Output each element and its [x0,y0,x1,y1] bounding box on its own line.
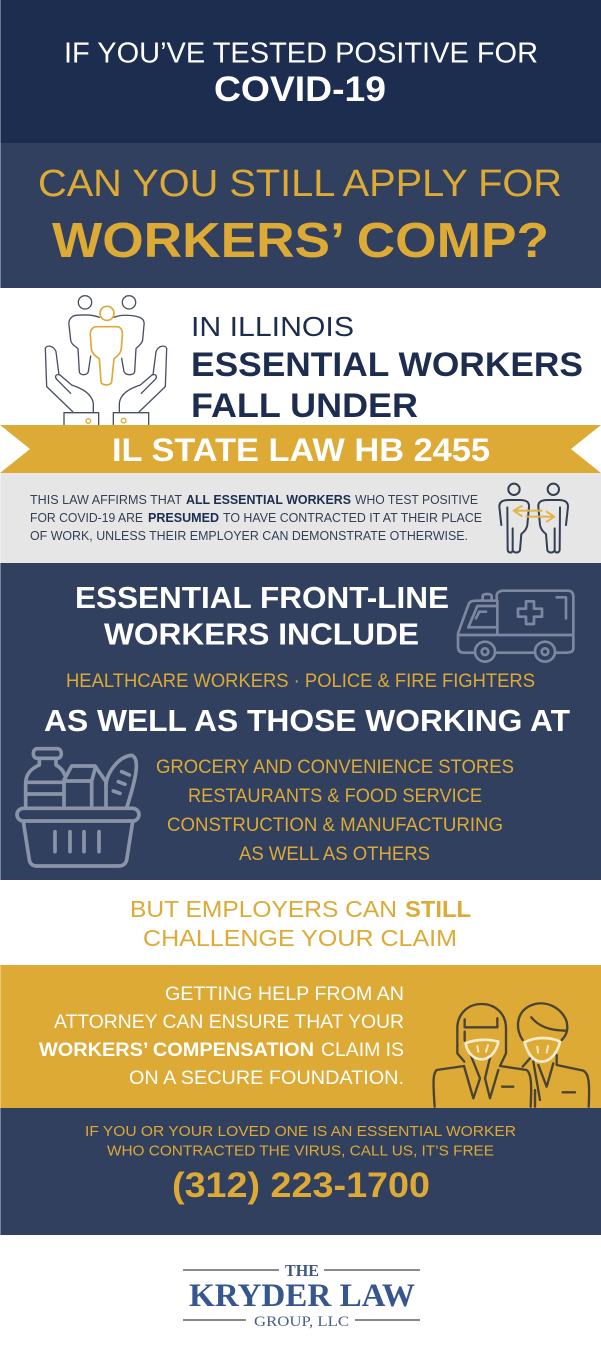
icon: grocery basket [17,749,139,866]
panel heading line 2: WORKERS INCLUDE [104,616,419,652]
text: employers challenge [130,896,471,951]
panel heading line 1: ESSENTIAL FRONT-LINE [75,580,449,615]
call to action text: IF YOU OR YOUR LOVED ONE IS AN ESSENTIAL WORKER [85,1123,516,1140]
panel: law explanation: FOR COVID-19 ARE [30,511,143,525]
phone number: (312) 223-1700 [172,1166,430,1205]
question emphasis: WORKERS’ COMP? [52,214,549,268]
panel: main question [0,143,601,288]
panel: law explanation: TO HAVE CONTRACTED IT AT THEIR PLACE [223,511,482,525]
text: employers challenge: STILL [405,896,471,922]
question line: CAN YOU STILL APPLY FOR [38,163,562,205]
ribbon text: IL STATE LAW HB 2455 [112,432,490,468]
panel: law explanation: ALL ESSENTIAL WORKERS [186,493,351,507]
workplace list: AS WELL AS OTHERS [239,844,430,865]
panel: attorney help: ON A SECURE FOUNDATION. [129,1067,404,1089]
panel: attorney help: ATTORNEY CAN ENSURE THAT YOUR [54,1011,404,1033]
panel: header [0,0,601,143]
workplace list: RESTAURANTS & FOOD SERVICE [188,786,482,807]
workplace list [156,757,514,865]
icon: ambulance [458,591,573,662]
panel: attorney help: GETTING HELP FROM AN [165,983,404,1005]
logo: Kryder Law Group: THE [285,1261,319,1280]
panel: law explanation: PRESUMED [148,511,219,525]
heading emphasis line 2: FALL UNDER [191,387,418,425]
panel: law explanation: WHO TEST POSITIVE [355,493,478,507]
ribbon: law name [0,425,601,473]
panel: law explanation: OF WORK, UNLESS THEIR EMPLOYER CAN DEMONSTRATE OTHERWISE. [30,529,468,543]
panel: attorney help: CLAIM IS [321,1039,404,1061]
panel: essential workers [0,563,601,880]
logo: Kryder Law Group: KRYDER LAW [189,1278,415,1314]
workplace list: GROCERY AND CONVENIENCE STORES [156,757,514,778]
header line: IF YOU’VE TESTED POSITIVE FOR [64,38,538,70]
heading emphasis line 1: ESSENTIAL WORKERS [191,346,583,384]
front-line worker list: HEALTHCARE WORKERS · POLICE & FIRE FIGHTERS [66,671,535,692]
icon: masked attorneys [434,1003,589,1107]
panel: attorney help: WORKERS’ COMPENSATION [39,1039,314,1061]
text: employers challenge: BUT EMPLOYERS CAN [130,896,397,922]
logo: Kryder Law Group: GROUP, LLC [254,1314,349,1330]
logo: Kryder Law Group [183,1261,420,1330]
subheading: AS WELL AS THOSE WORKING AT [44,704,570,738]
panel: law explanation [0,473,601,563]
heading: in Illinois: IN ILLINOIS [191,311,354,342]
icon: hands holding people [45,296,167,425]
heading: in Illinois [191,311,583,425]
panel: attorney help [0,965,601,1108]
header topic: COVID-19 [214,70,386,109]
panel: law explanation: THIS LAW AFFIRMS THAT [30,493,182,507]
call to action text: WHO CONTRACTED THE VIRUS, CALL US, IT’S FREE [107,1142,494,1160]
icon: two people exchange [499,484,568,552]
workplace list: CONSTRUCTION & MANUFACTURING [167,815,503,836]
text: employers challenge: CHALLENGE YOUR CLAIM [143,925,457,951]
panel: call to action [0,1108,601,1235]
call to action text [85,1123,516,1160]
